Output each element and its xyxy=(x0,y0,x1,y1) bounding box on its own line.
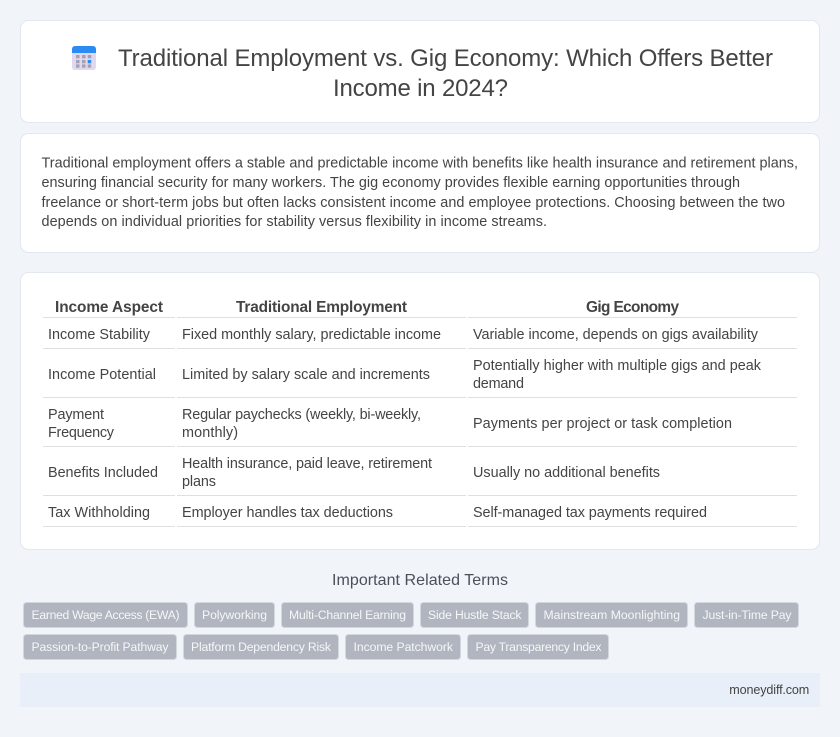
tag: Earned Wage Access xyxy=(24,602,188,628)
table row: income stability: Variable income, depends on gigs availability xyxy=(473,327,759,343)
table row: benefits included: plans xyxy=(182,474,216,490)
panel: description xyxy=(20,134,820,252)
tag: Just-in-Time Pay: Just-in-Time Pay xyxy=(702,608,792,622)
table row: benefits included: Benefits Included xyxy=(48,465,158,481)
text block: description paragraph: ensuring financial security for many workers. The gig economy provides flexible earning opportunities through xyxy=(42,175,740,191)
table row: income stability: Fixed monthly salary, predictable income xyxy=(182,327,441,343)
footer bar xyxy=(20,673,820,707)
panel: title header xyxy=(20,20,820,122)
text block: description paragraph: Traditional employment offers a stable and predictable income with benefits like health insurance and retirement plans, xyxy=(42,156,798,172)
table row: payment frequency: Frequency xyxy=(48,425,115,441)
heading: important related terms: Important Related Terms xyxy=(332,572,508,589)
table row: income potential: Potentially higher with multiple gigs and peak xyxy=(473,358,762,374)
tag: Mainstream Moonlighting: Mainstream Moonlighting xyxy=(544,608,680,622)
tag: Side Hustle Stack xyxy=(420,602,528,628)
tag: Passion-to-Profit Pathway xyxy=(24,634,176,660)
tag: Platform Dependency Risk: Platform Dependency Risk xyxy=(191,640,332,654)
table header row: Traditional Employment xyxy=(236,299,407,316)
tag: Income Patchwork xyxy=(346,634,460,660)
table header row xyxy=(55,299,679,316)
table header row: Income Aspect xyxy=(55,299,163,316)
text block: description paragraph: depends on individual priorities for stability versus flexibility in income streams. xyxy=(42,214,547,230)
tag: Polyworking xyxy=(194,602,274,628)
table row: income potential: Income Potential xyxy=(48,367,156,383)
tag: Pay Transparency Index xyxy=(468,634,608,660)
table header row: Gig Economy xyxy=(586,299,679,316)
table row: income stability xyxy=(48,327,759,343)
footer bar: moneydiff.com xyxy=(729,683,809,697)
table row: benefits included: Health insurance, paid leave, retirement xyxy=(182,456,432,472)
tag: Mainstream Moonlighting xyxy=(536,602,688,628)
table row: income stability: Income Stability xyxy=(48,327,151,343)
table row: benefits included: Usually no additional benefits xyxy=(473,465,660,481)
tag: Just-in-Time Pay xyxy=(694,602,798,628)
tag: Side Hustle Stack: Side Hustle Stack xyxy=(428,608,522,622)
tag: Income Patchwork: Income Patchwork xyxy=(354,640,454,654)
table row: payment frequency: Payments per project or task completion xyxy=(473,416,732,432)
table row: income potential: Limited by salary scale and increments xyxy=(182,367,430,383)
tag: Pay Transparency Index: Pay Transparency Index xyxy=(476,640,602,654)
panel: comparison table xyxy=(20,272,820,550)
table row: tax withholding: Employer handles tax deductions xyxy=(182,505,393,521)
tag: Earned Wage Access: Earned Wage Access (EWA) xyxy=(32,608,180,622)
table row: payment frequency: Regular paychecks (weekly, bi-weekly, xyxy=(182,407,421,423)
table row: payment frequency: monthly) xyxy=(182,425,238,441)
tag: Polyworking: Polyworking xyxy=(202,608,267,622)
table row: payment frequency xyxy=(48,407,732,441)
table row: income potential xyxy=(48,358,762,392)
title: Income in 2024? xyxy=(333,75,508,102)
table row: benefits included xyxy=(48,456,660,490)
tag: Platform Dependency Risk xyxy=(184,634,338,660)
text block: description paragraph: freelance or short-term jobs but often lacks consistent income and employee protections. Choosing between the two xyxy=(42,195,785,211)
tag list: related terms xyxy=(24,602,798,660)
tag: Passion-to-Profit Pathway: Passion-to-Profit Pathway xyxy=(32,640,169,654)
text block: description paragraph xyxy=(42,156,798,230)
icon: calendar xyxy=(72,46,96,70)
table row: tax withholding xyxy=(48,505,707,521)
title: Traditional Employment vs. Gig Economy: Which Offers Better xyxy=(118,45,773,72)
tag: Multi-Channel Earning xyxy=(282,602,414,628)
table row: tax withholding: Tax Withholding xyxy=(48,505,150,521)
table row: income potential: demand xyxy=(473,376,524,392)
title xyxy=(118,45,773,102)
tag: Multi-Channel Earning: Multi-Channel Earning xyxy=(289,608,406,622)
table row: tax withholding: Self-managed tax payments required xyxy=(473,505,707,521)
table row: payment frequency: Payment xyxy=(48,407,104,423)
